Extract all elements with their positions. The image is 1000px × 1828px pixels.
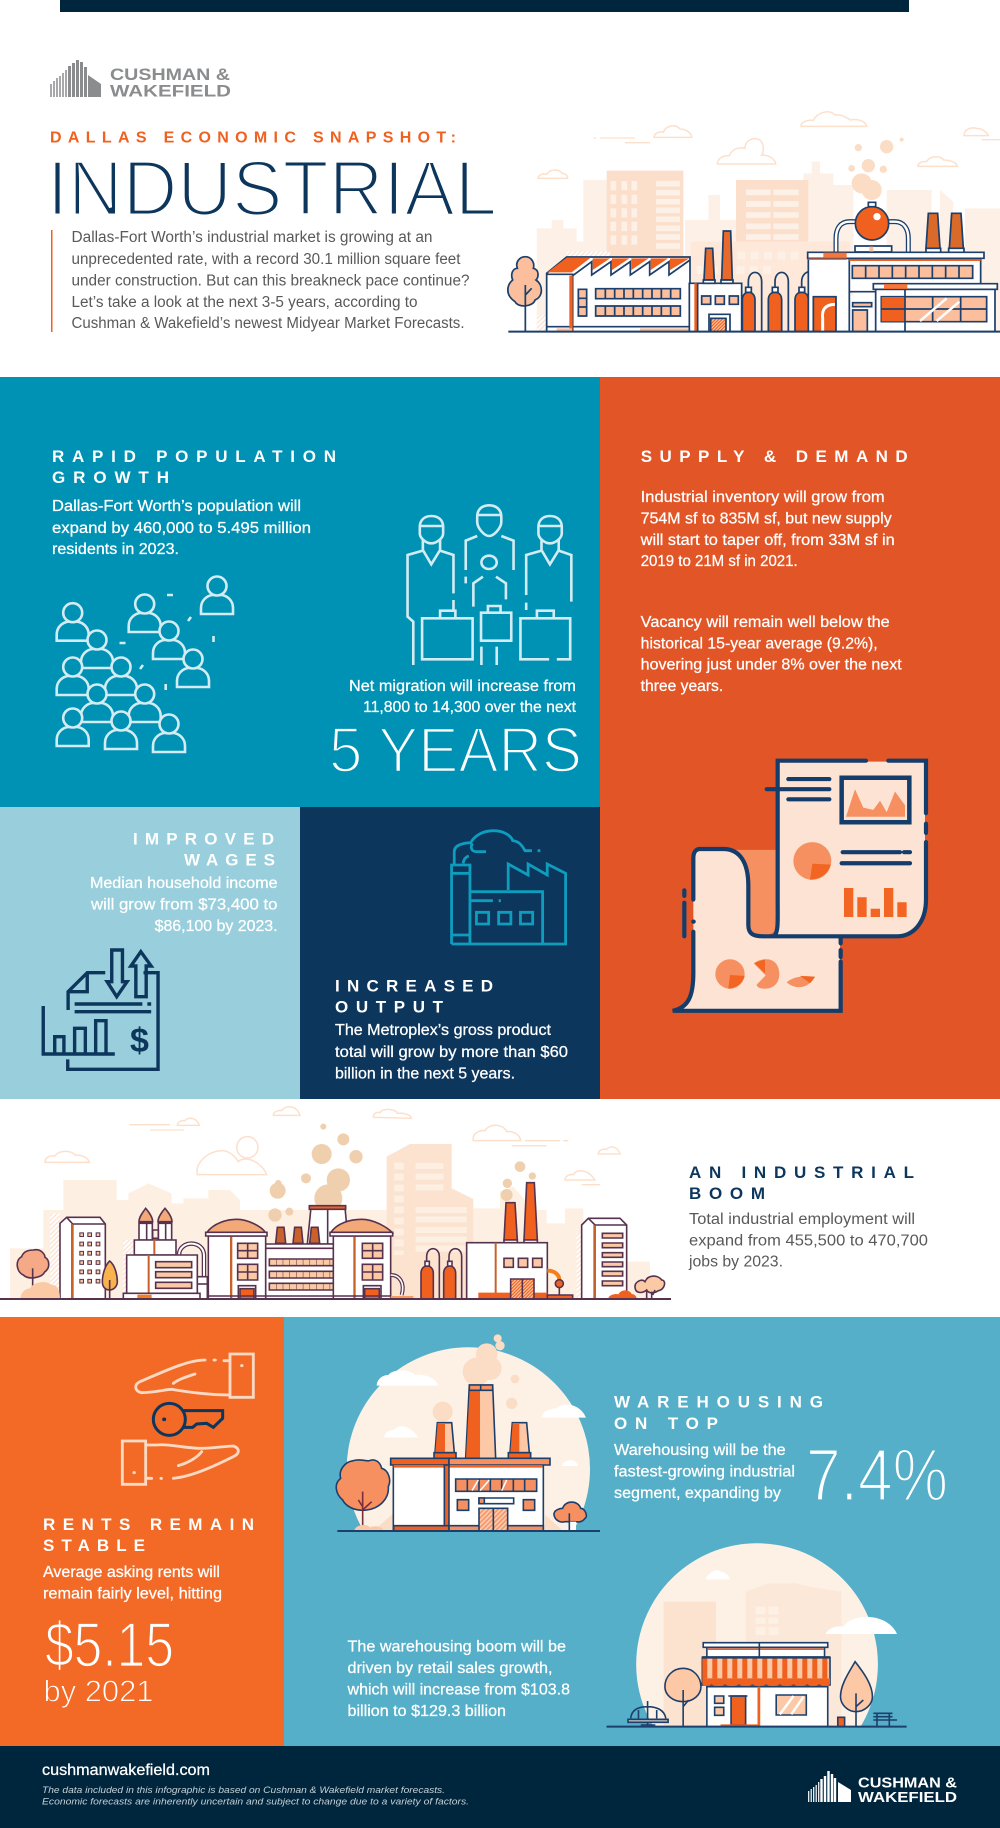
text block: total will grow by more than $60 [335, 1044, 568, 1061]
text block: Vacancy will remain well below the [641, 614, 890, 631]
title: INDUSTRIAL [47, 144, 497, 232]
tanks [742, 272, 808, 332]
text block: The Metroplex’s gross product [335, 1022, 552, 1039]
chimney block [689, 231, 742, 332]
icon: report documents [673, 761, 926, 1011]
caption: by 2021 [44, 1674, 154, 1709]
small plant [123, 1208, 207, 1299]
panel: rapid population growth [0, 377, 600, 807]
text block: historical 15-year average (9.2%), [641, 636, 878, 652]
tanks and right factory [0, 1183, 671, 1299]
intro text block: under construction. But can this breakneck pace continue? [72, 272, 470, 290]
text block: industrial boom: expand from 455,500 to 470,700 [689, 1233, 928, 1250]
heading: IMPROVED [133, 829, 274, 848]
text block: residents in 2023. [52, 541, 179, 558]
text block: 2019 to 21M sf in 2021. [641, 553, 798, 570]
text block: $86,100 by 2023. [155, 918, 278, 935]
icon: migrating family [408, 505, 571, 665]
illustration: industrial skyline header [508, 112, 1000, 332]
disclaimer [42, 1785, 469, 1808]
right plant [508, 202, 1000, 332]
heading [133, 829, 275, 870]
text block: The warehousing boom will be [348, 1639, 566, 1656]
heading: ON TOP [614, 1414, 718, 1433]
text block: fastest-growing industrial [614, 1464, 795, 1481]
text block [43, 1564, 222, 1603]
big number: $5.15 [45, 1611, 174, 1681]
text block: Median household income [90, 875, 278, 892]
footer logo [809, 1771, 958, 1806]
panel: warehousing on top [284, 1317, 1000, 1746]
panel: supply and demand [600, 377, 1000, 1099]
text block: industrial boom: BOOM [689, 1184, 765, 1203]
text block: billion to $129.3 billion [348, 1703, 506, 1720]
text block: industrial boom [688, 1163, 928, 1271]
heading [614, 1393, 823, 1433]
heading: RENTS REMAIN [43, 1515, 254, 1534]
text block [641, 614, 902, 695]
text block: Dallas-Fort Worth’s population will [52, 498, 301, 515]
panel: rents remain stable [0, 1317, 284, 1746]
header logo: CUSHMAN & [110, 65, 230, 84]
heading [52, 447, 336, 487]
text block: Industrial inventory will grow from [641, 489, 885, 506]
text block: expand by 460,000 to 5.495 million [52, 520, 311, 537]
heading [335, 976, 493, 1017]
website: cushmanwakefield.com [42, 1762, 210, 1779]
intro text block: Let’s take a look at the next 3-5 years, according to [72, 294, 418, 311]
text block: Warehousing will be the [614, 1442, 786, 1459]
text block [640, 489, 895, 570]
text block [614, 1442, 795, 1502]
icon: wage chart: $ [130, 1022, 149, 1060]
heading: SUPPLY & DEMAND [641, 447, 908, 466]
heading: GROWTH [52, 468, 169, 487]
icon: wage chart [43, 950, 158, 1069]
central domed factory [206, 1206, 413, 1299]
big number: 7.4% [806, 1434, 948, 1517]
illustration: industrial boom skyline [0, 1107, 671, 1299]
heading: WAREHOUSING [614, 1393, 823, 1412]
icon: hands and key [122, 1354, 253, 1484]
heading: OUTPUT [335, 998, 444, 1017]
text block: will start to taper off, from 33M sf in [640, 532, 895, 549]
disclaimer: Economic forecasts are inherently uncertain and subject to change due to a variety of factors. [42, 1796, 469, 1808]
text block: net migration [349, 678, 577, 716]
intro text block: Cushman & Wakefield’s newest Midyear Market Forecasts. [72, 315, 464, 332]
text block [90, 875, 278, 935]
text block: billion in the next 5 years. [335, 1066, 515, 1083]
text block: remain fairly level, hitting [43, 1586, 222, 1603]
text block: net migration: 11,800 to 14,300 over the next [363, 699, 577, 716]
header logo [51, 60, 231, 101]
header logo: WAKEFIELD [110, 82, 231, 101]
tree and first factory [508, 257, 690, 332]
text block: industrial boom: AN INDUSTRIAL [689, 1163, 914, 1182]
intro text block: unprecedented rate, with a record 30.1 million square feet [72, 251, 461, 268]
top bar [60, 0, 909, 12]
panel: increased output [300, 807, 600, 1099]
text block: three years. [641, 678, 723, 695]
kicker heading: DALLAS ECONOMIC SNAPSHOT: [50, 130, 456, 146]
panel: improved wages [0, 807, 300, 1099]
apartment and trees [17, 1217, 117, 1299]
footer logo: WAKEFIELD [858, 1790, 957, 1806]
text block: will grow from $73,400 to [90, 897, 278, 914]
illustration: warehouse factory [336, 1334, 600, 1531]
intro text block: Dallas-Fort Worth’s industrial market is growing at an [72, 229, 432, 246]
heading: STABLE [43, 1536, 145, 1555]
text block [335, 1022, 568, 1083]
heading [43, 1515, 254, 1555]
text block: industrial boom: Total industrial employment will [689, 1211, 915, 1228]
text block: industrial boom: jobs by 2023. [688, 1254, 783, 1271]
text block [346, 1639, 570, 1720]
footer [0, 1746, 1000, 1828]
text block: hovering just under 8% over the next [641, 657, 902, 674]
text block: which will increase from $103.8 [346, 1682, 570, 1699]
big number: 5 YEARS [329, 714, 582, 786]
icon: crowd [57, 576, 233, 752]
heading: RAPID POPULATION [52, 447, 336, 466]
text block: segment, expanding by [614, 1485, 781, 1502]
footer logo: CUSHMAN & [858, 1776, 958, 1792]
text block: Average asking rents will [43, 1564, 220, 1581]
text block: 754M sf to 835M sf, but new supply [641, 510, 892, 527]
text block [52, 498, 311, 558]
intro text block [51, 229, 470, 332]
heading: WAGES [184, 851, 275, 870]
heading: INCREASED [335, 976, 493, 995]
illustration: retail store [607, 1543, 907, 1727]
text block: driven by retail sales growth, [348, 1660, 552, 1677]
disclaimer: The data included in this infographic is based on Cushman & Wakefield market forecasts. [42, 1785, 445, 1796]
text block: net migration: Net migration will increase from [349, 678, 576, 695]
icon: factory [452, 831, 566, 944]
